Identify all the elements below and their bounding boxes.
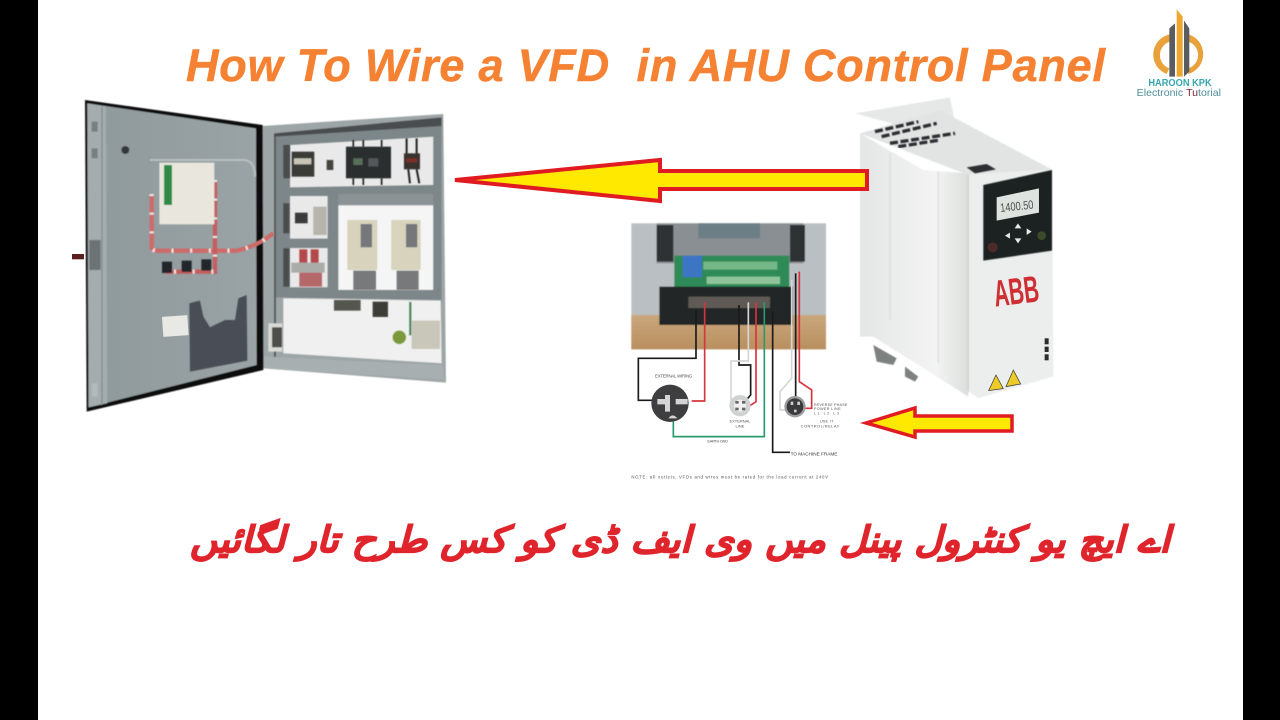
top clip	[967, 164, 996, 173]
diagram labels: LINE	[736, 424, 745, 429]
VFD wiring diagram	[631, 223, 848, 479]
status indicators	[1045, 338, 1049, 360]
mounting feet	[873, 345, 918, 382]
drive body	[855, 97, 1053, 398]
diagram labels: EXTERNAL	[729, 419, 751, 424]
terminal photo	[631, 223, 826, 349]
document holder	[189, 295, 247, 372]
lower components	[268, 300, 440, 352]
large arrow to panel	[455, 160, 867, 201]
diagram labels	[631, 374, 848, 479]
cabinet body	[263, 114, 446, 383]
plug: dryer outlet	[651, 385, 689, 422]
Urdu caption: اے ایچ یو کنٹرول پینل میں وی ایف ڈی کو کس طرح تار لگائیں	[190, 518, 1175, 562]
backplate openings	[290, 137, 433, 290]
small arrow to diagram	[866, 408, 1012, 437]
plug: 4 pin outlet	[729, 395, 751, 416]
top vents	[875, 122, 955, 147]
diagram labels: REVERSE PHASE	[814, 403, 848, 407]
door label	[162, 315, 189, 337]
ABB VFD photo	[855, 97, 1053, 398]
diagram labels: NOTE: all outlets, VFDs and wires must be rated for the load current at 240V	[631, 474, 828, 479]
diagram labels: USE IT	[820, 419, 834, 423]
logo: Haroon KPK Electronic Tutorial	[1137, 9, 1221, 99]
title: How To Wire a VFD in AHU Control Panel	[186, 40, 1106, 91]
warning triangles	[989, 370, 1021, 391]
control panel photo	[72, 100, 446, 412]
door enclosure with wiring	[150, 160, 273, 273]
logo subtitle: Electronic Tutorial	[1137, 88, 1221, 99]
ABB logo: ABB	[991, 267, 1041, 315]
breakers and terminals	[283, 138, 420, 287]
diagram labels: L1 L2 L3	[814, 411, 839, 415]
diagram labels: EXTERNAL WIRING	[655, 374, 693, 379]
diagram labels: CONTROL/RELAY	[801, 424, 840, 429]
control panel keypad	[983, 170, 1052, 261]
diagram labels: TO MACHINE FRAME	[791, 451, 837, 456]
diagram labels: POWER LINE	[814, 407, 841, 411]
diagram labels: EARTH GND	[707, 438, 728, 443]
VFD drive left	[347, 220, 377, 290]
handle stub	[72, 254, 84, 259]
VFD drive right	[391, 220, 421, 290]
right black side bar	[1243, 0, 1280, 720]
icon: logo tower mark	[1153, 9, 1203, 77]
logo name: HAROON KPK	[1148, 78, 1212, 89]
wires	[638, 272, 812, 452]
display readout: 1400.50	[1000, 198, 1034, 215]
left black side bar	[0, 0, 38, 720]
keypad arrows	[1005, 223, 1032, 243]
cabinet door	[85, 100, 263, 412]
plug: control outlet	[784, 396, 806, 417]
